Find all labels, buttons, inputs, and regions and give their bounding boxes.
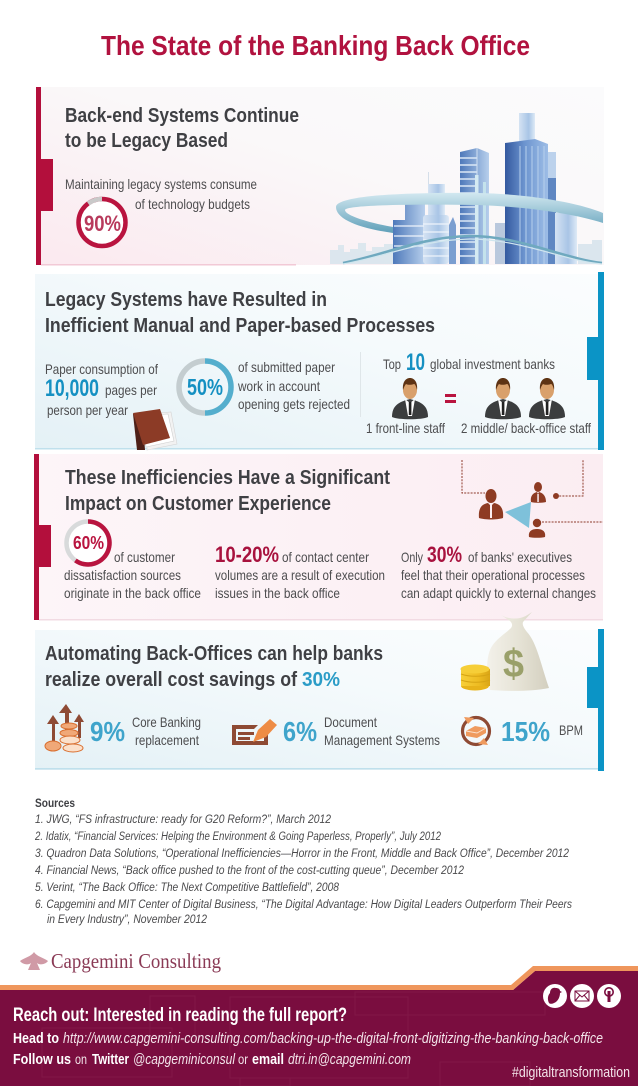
text: contact center volumes: issues in the back office <box>215 585 340 601</box>
text: paper consumption <box>45 361 158 418</box>
icon: document and pen <box>232 719 277 745</box>
sources list: 4. Financial News, “Back office pushed to the front of the cost-cutting queue”, December 2012 <box>35 865 465 877</box>
stat: 15% BPM <box>501 716 583 747</box>
text: rejected paper work: work in account <box>237 378 320 394</box>
footer text: follow us: dtri.in@capgemini.com <box>288 1052 411 1068</box>
heading: legacy systems resulted <box>45 288 435 337</box>
icon: equals sign <box>445 394 456 403</box>
icon: mail envelope <box>570 984 594 1008</box>
heading: inefficiencies impact: Impact on Customer Experience <box>65 492 331 515</box>
panel: automation savings <box>35 612 604 771</box>
footer text: follow us <box>13 1051 411 1068</box>
chart: 50% ring <box>179 361 231 413</box>
footer text: follow us: email <box>252 1051 284 1068</box>
text: executives: Only <box>401 549 423 565</box>
sources list <box>34 796 572 926</box>
icon: back-office staff person two <box>529 378 565 419</box>
icon: back-office staff person one <box>485 378 521 419</box>
panel: legacy systems <box>36 87 604 266</box>
text: rejected paper work: of submitted paper <box>238 359 335 375</box>
icon: front-line staff person <box>392 378 428 419</box>
text: rejected paper work: opening gets rejected <box>238 396 350 412</box>
text: paper consumption: Paper consumption of <box>45 361 158 377</box>
footer text: follow us: @capgeminiconsul <box>133 1052 236 1068</box>
footer text: follow us: on <box>75 1051 87 1067</box>
title: The State of the Banking Back Office <box>101 30 530 61</box>
stat: 15% BPM: BPM <box>559 722 583 738</box>
stat: 6% document management: 6% <box>283 716 317 747</box>
stat: 9% core banking: Core Banking <box>132 714 201 730</box>
heading: back-end systems <box>65 104 299 152</box>
illustration: money bag and coins <box>460 612 549 691</box>
heading: automating back-offices <box>45 642 383 691</box>
footer text: follow us: or <box>238 1051 248 1067</box>
stat: 6% document management: Management Systems <box>324 732 440 748</box>
illustration: city skyline <box>330 113 603 264</box>
text: customer dissatisfaction: of customer <box>114 549 175 565</box>
sources list: 6. Capgemini and MIT Center of Digital Business, “The Digital Advantage: How Digital Leaders Outperform Their Peers <box>35 899 572 911</box>
heading: automating back-offices: Automating Back-Offices can help banks <box>45 642 383 665</box>
text: executives: can adapt quickly to external changes <box>401 585 596 601</box>
icon: book <box>133 409 177 450</box>
heading: automating back-offices: 30% <box>302 668 340 691</box>
text: contact center volumes: 10-20% <box>215 542 279 567</box>
stat: 9% core banking: replacement <box>135 732 199 748</box>
stat: 15% BPM: 15% <box>501 716 550 747</box>
text: top 10 banks <box>383 349 555 376</box>
heading: inefficiencies impact <box>65 466 390 515</box>
text: customer dissatisfaction: dissatisfaction sources <box>64 567 181 583</box>
sources list: Sources <box>35 796 75 810</box>
text: contact center volumes: of contact center <box>282 549 369 565</box>
text: paper consumption: person per year <box>47 402 128 418</box>
heading: back-end systems: to be Legacy Based <box>65 129 228 152</box>
footer text: reach out: Reach out: Interested in reading the full report? <box>13 1004 347 1026</box>
text: maintaining legacy systems <box>65 176 257 212</box>
footer text: follow us: Follow us <box>13 1051 71 1068</box>
heading: automating back-offices: realize overall cost savings of <box>45 668 297 691</box>
text: executives <box>401 542 596 601</box>
icon: twitter bird <box>543 984 567 1008</box>
icon: people network <box>462 460 603 538</box>
heading: legacy systems resulted: Inefficient Manual and Paper-based Processes <box>45 314 435 337</box>
sources list: 3. Quadron Data Solutions, “Operational Inefficiencies—Horror in the Front, Middle and Back Office”, December 2012 <box>35 848 570 860</box>
footer band <box>0 966 638 1086</box>
text: paper consumption: pages per <box>105 382 157 398</box>
text: maintaining legacy systems: Maintaining legacy systems consume <box>65 176 257 192</box>
sources list: in Every Industry”, November 2012 <box>47 914 208 926</box>
text: top 10 banks: global investment banks <box>430 356 555 372</box>
text: rejected paper work <box>237 359 350 412</box>
text: customer dissatisfaction <box>64 549 201 601</box>
sources list: 2. Idatix, “Financial Services: Helping the Environment & Going Paperless, Properly”, July 2012 <box>34 831 442 843</box>
chart: 90% ring <box>78 199 126 246</box>
stat: 9% core banking: 9% <box>90 716 125 747</box>
text: maintaining legacy systems: of technology budgets <box>135 196 250 212</box>
stat: 9% core banking <box>90 714 201 748</box>
panel: paper processes <box>35 272 604 450</box>
text: staff labels <box>366 420 591 436</box>
text: contact center volumes <box>215 542 385 601</box>
sources list: 1. JWG, “FS infrastructure: ready for G20 Reform?”, March 2012 <box>35 814 332 826</box>
chart: 60% ring <box>66 522 110 564</box>
text: top 10 banks: Top <box>383 356 401 372</box>
text: staff labels: 1 front-line staff <box>366 420 445 436</box>
icon: information pin <box>597 984 621 1008</box>
footer text: head to link: Head to <box>13 1030 59 1047</box>
footer text: follow us: Twitter <box>92 1051 129 1068</box>
icon: BPM cycle <box>462 717 490 745</box>
text: executives: of banks' executives <box>468 549 572 565</box>
text: customer dissatisfaction: originate in the back office <box>64 585 201 601</box>
panel: customer experience <box>34 454 603 620</box>
chart: 90% ring: 90% <box>84 211 121 236</box>
heading: inefficiencies impact: These Inefficiencies Have a Significant <box>65 466 390 489</box>
icon: coins and arrows <box>45 704 84 752</box>
logo: Capgemini Consulting: Capgemini Consulting <box>51 949 221 973</box>
chart: 50% ring: 50% <box>187 374 223 400</box>
sources list: 5. Verint, “The Back Office: The Next Competitive Battlefield”, 2008 <box>35 882 340 894</box>
text: executives: 30% <box>427 542 462 567</box>
text: paper consumption: 10,000 <box>45 375 99 402</box>
text: contact center volumes: volumes are a result of execution <box>215 567 385 583</box>
text: staff labels: 2 middle/ back-office staff <box>461 420 591 436</box>
illustration: money bag and coins: $ <box>503 642 524 686</box>
heading: back-end systems: Back-end Systems Continue <box>65 104 299 127</box>
heading: legacy systems resulted: Legacy Systems have Resulted in <box>45 288 327 311</box>
chart: 60% ring: 60% <box>73 533 104 553</box>
text: executives: feel that their operational processes <box>401 567 585 583</box>
stat: 6% document management: Document <box>324 714 377 730</box>
stat: 6% document management <box>283 714 440 748</box>
text: top 10 banks: 10 <box>406 349 425 376</box>
